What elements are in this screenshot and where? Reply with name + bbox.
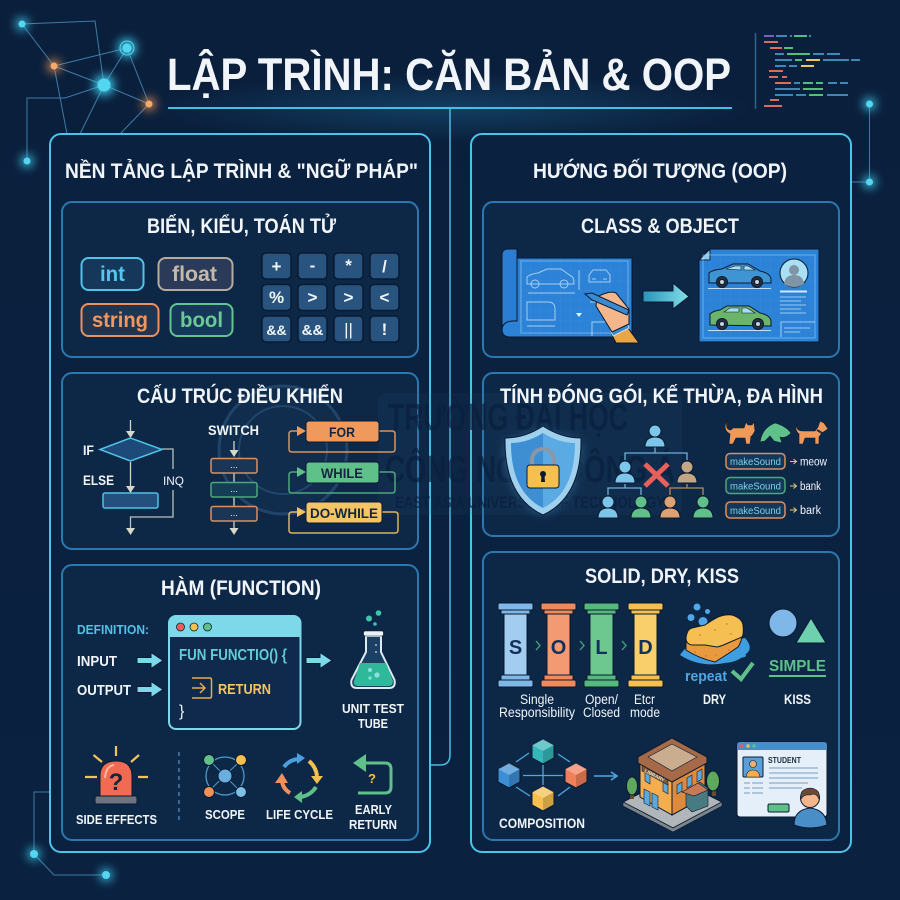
if-else flowchart (83, 420, 184, 535)
while loop (289, 462, 395, 493)
network decoration: right side (851, 98, 876, 188)
for loop: FOR (329, 424, 355, 440)
heading right: HƯỚNG ĐỐI TƯỢNG (OOP) (533, 157, 787, 183)
polymorphism list: makeSound (730, 480, 781, 492)
operator keys: - (310, 256, 315, 275)
heading: BIẾN, KIỂU, TOÁN TỬ (147, 214, 336, 238)
sub-panel frames (62, 202, 839, 840)
panel: class & object (502, 215, 819, 343)
heading: CLASS & OBJECT (581, 215, 739, 238)
icon: blueprint (502, 249, 639, 343)
polymorphism list: bank (800, 481, 821, 493)
function window: RETURN (218, 681, 271, 698)
solid pillars: S (509, 637, 522, 659)
definition labels (77, 622, 149, 699)
icon: dry sponge: DRY (703, 692, 726, 707)
solid pillars: Etcr (634, 692, 655, 707)
panel: cấu trúc điều khiển (83, 384, 398, 535)
icon: scope: SCOPE (205, 807, 245, 822)
operator keys: * (345, 256, 352, 275)
solid pillars: L (595, 637, 608, 659)
polymorphism list: makeSound (730, 505, 781, 517)
title: LẬP TRÌNH: CĂN BẢN & OOP (167, 49, 731, 100)
blue car (709, 264, 771, 288)
icon: side effects siren (76, 746, 157, 827)
function window (169, 616, 300, 729)
function window: } (179, 703, 185, 720)
operator keys: > (344, 288, 354, 307)
operator keys: + (272, 257, 282, 276)
heading: CẤU TRÚC ĐIỀU KHIỂN (137, 384, 343, 408)
icon: dry sponge (680, 604, 753, 707)
operator keys: % (269, 288, 284, 307)
type chips (82, 258, 232, 336)
dashed divider (178, 752, 180, 820)
solid pillars: O (551, 637, 566, 659)
network decoration: top left (16, 18, 155, 167)
definition labels: DEFINITION: (77, 622, 149, 637)
type chips: float (172, 263, 217, 286)
type chips: string (92, 309, 148, 332)
icon: library building: LIBRARY (643, 768, 666, 784)
operator keys (262, 253, 399, 342)
composition diagram: COMPOSITION (499, 815, 585, 831)
switch: SWITCH (208, 422, 259, 438)
icon: early return (349, 754, 397, 832)
operator keys: > (308, 288, 318, 307)
switch: ... (230, 460, 238, 470)
operator keys: ! (382, 320, 387, 339)
switch: ... (230, 484, 238, 494)
title underline (168, 107, 732, 109)
icon: shield with lock (505, 426, 581, 515)
operator keys: < (380, 288, 390, 307)
icon: student card: STUDENT (768, 756, 801, 765)
icon: scope (204, 754, 246, 822)
heading: TÍNH ĐÓNG GÓI, KẾ THỪA, ĐA HÌNH (500, 384, 823, 408)
for loop (289, 421, 395, 452)
function window: FUN FUNCTIO() { (179, 647, 287, 664)
icon: library building (623, 738, 722, 832)
heading: HÀM (FUNCTION) (161, 577, 321, 600)
icon: object card (699, 249, 819, 342)
do-while loop (289, 502, 398, 533)
solid pillars: Single (520, 692, 554, 707)
solid pillars: Closed (583, 705, 620, 720)
icon: student card (737, 742, 827, 828)
icon: hand with pencil (585, 292, 639, 343)
do-while loop: DO-WHILE (310, 505, 378, 521)
output arrow (306, 652, 332, 668)
title glow (150, 74, 750, 142)
operator keys: && (266, 322, 287, 338)
solid pillars: Responsibility (499, 705, 575, 720)
operator keys: || (344, 320, 353, 339)
definition labels: OUTPUT (77, 683, 131, 699)
definition labels: INPUT (77, 654, 117, 670)
outer frame right (471, 134, 851, 852)
while loop: WHILE (321, 465, 363, 481)
green car (710, 306, 771, 330)
arrow: class to object (643, 283, 689, 309)
network decoration: bottom left (28, 792, 112, 881)
solid pillars: mode (630, 705, 660, 720)
solid pillars (498, 603, 663, 720)
input arrows (137, 652, 163, 698)
type chips: int (100, 263, 125, 286)
watermark: CÔNG NGHỆ ĐÔNG Á (385, 446, 675, 491)
solid pillars: Open/ (585, 692, 618, 707)
icon: life cycle (266, 753, 333, 822)
icon: life cycle: LIFE CYCLE (266, 807, 333, 822)
watermark: EAST ASIA UNIVERSITY OF TECHNOLOGY (395, 493, 666, 512)
watermark: TRƯỜNG ĐẠI HỌC (388, 395, 628, 439)
switch: ... (230, 508, 238, 518)
icon: kiss shapes: SIMPLE (769, 658, 826, 675)
icon: kiss shapes (769, 609, 826, 707)
icon: flask: TUBE (358, 716, 388, 731)
icon: dry sponge: repeat (685, 668, 727, 685)
polymorphism list: bark (800, 505, 821, 517)
panel: hàm (function) (76, 577, 404, 832)
icon: flask: UNIT TEST (342, 701, 404, 716)
outer frame left (50, 134, 430, 852)
heading: SOLID, DRY, KISS (585, 565, 739, 588)
inheritance tree (598, 425, 713, 518)
icon: animals (725, 420, 828, 444)
if-else flowchart: IF (83, 442, 94, 458)
panel: biến, kiểu, toán tử (82, 214, 399, 342)
icon: side effects siren: SIDE EFFECTS (76, 812, 157, 827)
icon: early return: RETURN (349, 817, 397, 832)
operator keys: && (302, 322, 323, 339)
switch (208, 422, 259, 535)
polymorphism list (726, 454, 828, 518)
polymorphism list: makeSound (730, 456, 781, 468)
watermark (219, 386, 682, 515)
panel: encapsulation, inheritance, polymorphism (500, 384, 828, 518)
code snippet decoration: top right (756, 33, 860, 109)
type chips: bool (180, 309, 223, 332)
connector from title to panels (430, 108, 450, 765)
icon: early return: ? (368, 771, 376, 786)
icon: kiss shapes: KISS (784, 692, 811, 707)
icon: side effects siren: ? (109, 769, 123, 796)
if-else flowchart: ELSE (83, 472, 114, 488)
if-else flowchart: INQ (163, 474, 184, 488)
icon: early return: EARLY (355, 802, 392, 817)
composition diagram (498, 739, 617, 831)
polymorphism list: meow (800, 456, 828, 468)
heading left: NỀN TẢNG LẬP TRÌNH & "NGỮ PHÁP" (65, 158, 418, 183)
icon: flask (342, 610, 404, 731)
operator keys: / (382, 257, 387, 276)
panel: solid, dry, kiss (498, 565, 827, 832)
solid pillars: D (638, 637, 653, 659)
avatar (780, 259, 808, 287)
